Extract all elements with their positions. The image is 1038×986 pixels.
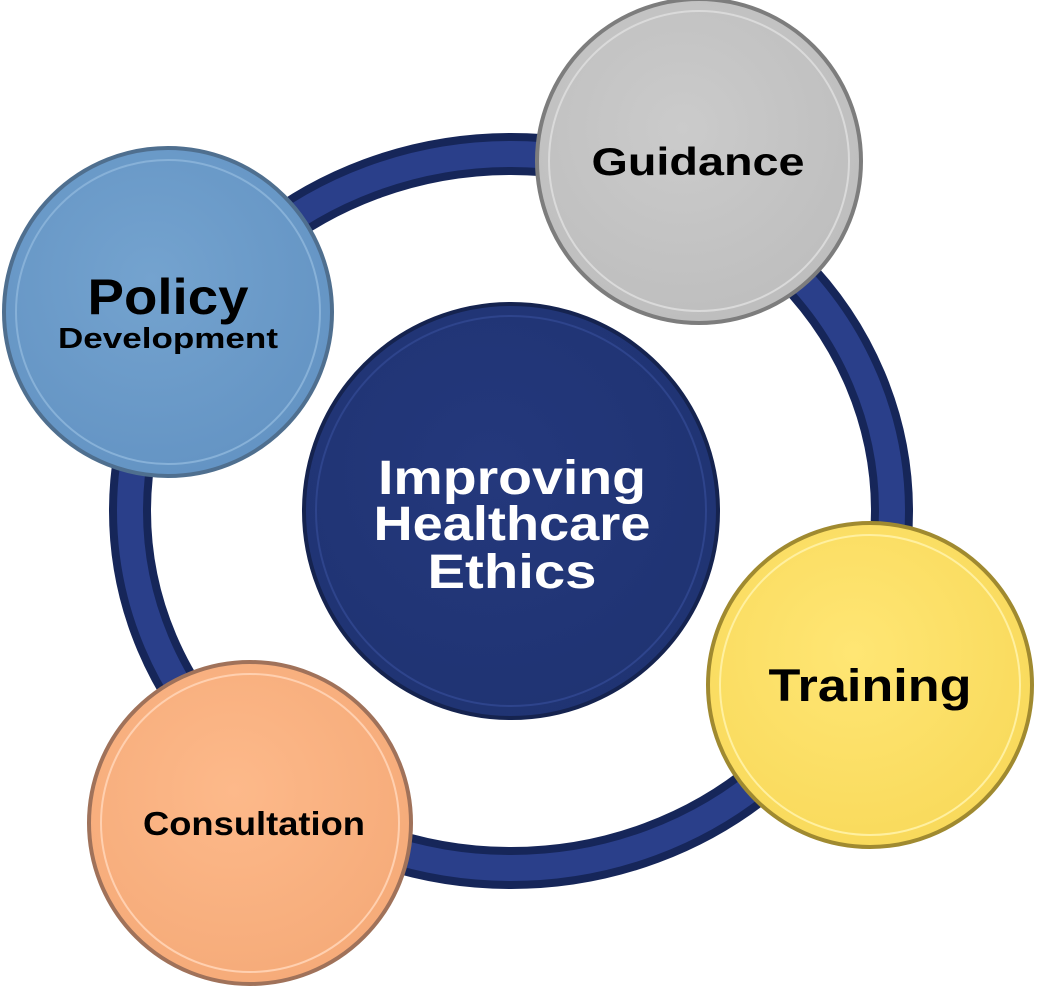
- circle: Policy Development: Development: [58, 323, 278, 355]
- circle: Training: Training: [768, 660, 972, 711]
- center circle: Improving Healthcare Ethics: Improving: [378, 452, 646, 505]
- circle: Policy Development: Policy: [88, 269, 249, 325]
- circle: Consultation: Consultation: [143, 805, 365, 842]
- center circle: Improving Healthcare Ethics: Ethics: [428, 546, 596, 599]
- center circle: Improving Healthcare Ethics: Healthcare: [374, 498, 650, 551]
- circle: Training: [708, 523, 1032, 847]
- center circle: Improving Healthcare Ethics: [304, 304, 718, 718]
- circle: Guidance: [537, 0, 861, 323]
- circle: Consultation: [89, 662, 411, 984]
- circle: Guidance: Guidance: [592, 141, 804, 184]
- circle: Policy Development: [4, 148, 332, 476]
- ring: [130, 154, 892, 868]
